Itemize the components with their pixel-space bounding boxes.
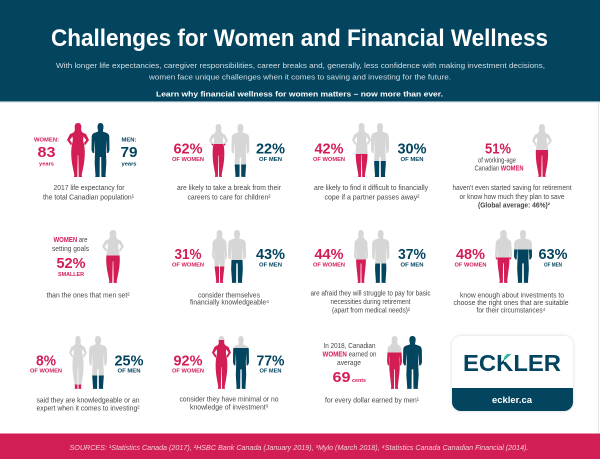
men percent: OF MEN xyxy=(260,369,282,375)
caption: are likely to take a break from their xyxy=(177,185,282,192)
icon: woman and man xyxy=(212,230,246,283)
women percent: OF WOMEN xyxy=(172,369,204,375)
caption: financially knowledgeable⁴ xyxy=(190,300,269,306)
stat: minimal knowledge xyxy=(172,336,284,412)
men percent: OF MEN xyxy=(400,262,424,268)
women percent xyxy=(172,246,204,268)
caption: choose the right ones that are suitable xyxy=(454,300,569,307)
sources text: SOURCES: ¹Statistics Canada (2017), ²HSBC Bank Canada (January 2019), ³Mylo (March 2018), ⁴Statistics Canada Canadian Financial (2014). xyxy=(70,445,529,452)
caption: expert when it comes to investing² xyxy=(36,406,140,412)
descriptor: cents xyxy=(352,378,366,384)
caption: said they are knowledgeable or an xyxy=(36,398,140,404)
men percent: 63% xyxy=(538,246,568,263)
men label: 79 xyxy=(120,144,138,161)
caption xyxy=(180,396,279,412)
descriptor xyxy=(322,343,377,386)
men percent: OF MEN xyxy=(544,262,562,268)
caption: careers to care for children² xyxy=(188,194,271,202)
caption xyxy=(314,185,428,202)
caption: the total Canadian population¹ xyxy=(43,194,135,202)
icon: woman and man xyxy=(67,123,110,177)
caption xyxy=(36,398,140,412)
men percent: 37% xyxy=(398,246,426,263)
descriptor: of working-age xyxy=(478,158,516,164)
caption: or know how much they plan to save xyxy=(460,194,565,201)
descriptor: setting goals xyxy=(52,246,89,253)
caption xyxy=(190,292,269,306)
descriptor: Canadian WOMEN xyxy=(474,166,524,172)
men percent: OF MEN xyxy=(118,369,141,375)
men percent: 43% xyxy=(256,246,285,263)
icon: woman xyxy=(532,124,552,177)
caption: consider themselves xyxy=(198,292,260,300)
title: Challenges for Women and Financial Wellness xyxy=(51,25,548,52)
icon: woman and man xyxy=(209,124,249,177)
women percent: 92% xyxy=(174,352,202,370)
logo K arm mask xyxy=(503,353,514,362)
caption: (apart from medical needs)² xyxy=(332,308,411,314)
women percent: 44% xyxy=(314,246,344,263)
women percent: OF WOMEN xyxy=(172,157,204,163)
stat: life expectancy xyxy=(34,123,138,202)
men label: MEN: xyxy=(122,138,137,144)
stat: earnings gap xyxy=(322,336,422,404)
women label: WOMEN: xyxy=(34,138,59,144)
stat: smaller goals xyxy=(46,230,130,300)
men percent: OF MEN xyxy=(400,157,424,163)
caption: necessities during retirement xyxy=(330,299,411,306)
call to action line: Learn why financial wellness for women matters – now more than ever. xyxy=(156,90,443,98)
percent: 51% xyxy=(485,140,511,158)
women percent: 48% xyxy=(456,246,485,263)
women label xyxy=(34,138,59,168)
caption: consider they have minimal or no xyxy=(180,396,279,404)
caption: 2017 life expectancy for xyxy=(54,185,125,192)
women percent: OF WOMEN xyxy=(172,262,204,268)
caption: (Global average: 46%)² xyxy=(478,202,551,210)
caption xyxy=(310,290,431,314)
stat: basic necessities xyxy=(310,230,431,314)
caption: know enough about investments to xyxy=(460,292,564,300)
descriptor: In 2018, Canadian xyxy=(324,343,376,350)
icon: woman xyxy=(102,230,124,283)
descriptor xyxy=(52,237,89,278)
women percent xyxy=(30,352,62,375)
stat: career breaks xyxy=(172,124,285,202)
caption: for their circumstances⁴ xyxy=(476,308,546,314)
caption: are likely to find it difficult to financially xyxy=(314,185,428,192)
stat: knowledgeable or expert xyxy=(30,336,144,412)
women percent: 42% xyxy=(314,140,344,158)
men percent: 25% xyxy=(114,352,144,370)
women percent: OF WOMEN xyxy=(454,262,487,268)
descriptor: average xyxy=(337,360,361,367)
icon: woman and man xyxy=(354,230,389,283)
women label: years xyxy=(39,162,54,168)
men percent: 30% xyxy=(398,140,426,158)
caption xyxy=(177,185,282,202)
women percent: 31% xyxy=(174,246,202,263)
icon: woman and man xyxy=(69,336,107,389)
intro paragraph: women face unique challenges when it comes to saving and investing for the future. xyxy=(148,72,451,82)
website: eckler.ca xyxy=(492,395,533,406)
icon: woman and man xyxy=(387,336,422,389)
men percent: 22% xyxy=(256,140,285,158)
caption: cope if a partner passes away² xyxy=(324,194,420,202)
caption xyxy=(452,185,572,210)
icon: woman and man xyxy=(212,336,249,389)
men label xyxy=(120,138,138,168)
women label: 83 xyxy=(38,144,56,161)
icon: woman and man xyxy=(352,123,389,177)
stat: financially knowledgeable xyxy=(172,230,285,306)
women percent: 62% xyxy=(174,140,202,158)
right edge line xyxy=(598,102,599,433)
descriptor: WOMEN are xyxy=(54,237,88,244)
caption: knowledge of investment³ xyxy=(190,404,269,412)
caption: haven't even started saving for retirement xyxy=(452,185,572,192)
header banner xyxy=(0,0,600,102)
intro paragraph xyxy=(56,61,545,82)
stat: losing a partner xyxy=(313,123,428,202)
men percent: OF MEN xyxy=(259,157,282,163)
caption xyxy=(454,292,569,314)
men percent: OF MEN xyxy=(259,262,282,268)
descriptor: 69 xyxy=(332,369,350,386)
men percent: 77% xyxy=(256,352,284,370)
women percent: OF WOMEN xyxy=(30,369,62,375)
descriptor: SMALLER xyxy=(58,272,84,278)
women percent: OF WOMEN xyxy=(313,157,345,163)
descriptor xyxy=(474,158,524,172)
icon: logo leaf xyxy=(504,354,512,361)
descriptor: WOMEN earned on xyxy=(322,352,377,358)
caption: than the ones that men set² xyxy=(46,292,130,300)
women percent: OF WOMEN xyxy=(313,262,345,268)
stat: investment knowledge xyxy=(454,230,569,314)
men label: years xyxy=(122,162,137,168)
sources footer xyxy=(0,434,600,459)
intro paragraph: With longer life expectancies, caregiver responsibilities, career breaks and, generally, less confidence with making investment decisions, xyxy=(56,61,545,70)
stat: not saving for retirement xyxy=(452,124,572,210)
descriptor: 52% xyxy=(56,255,86,272)
logo wordmark: ECKLER xyxy=(463,350,561,376)
caption xyxy=(43,185,135,202)
caption: are afraid they will struggle to pay for basic xyxy=(310,290,431,298)
women percent: 8% xyxy=(36,352,56,370)
logo card xyxy=(452,336,573,411)
icon: woman and man xyxy=(495,230,532,283)
caption: for every dollar earned by men¹ xyxy=(325,398,420,404)
